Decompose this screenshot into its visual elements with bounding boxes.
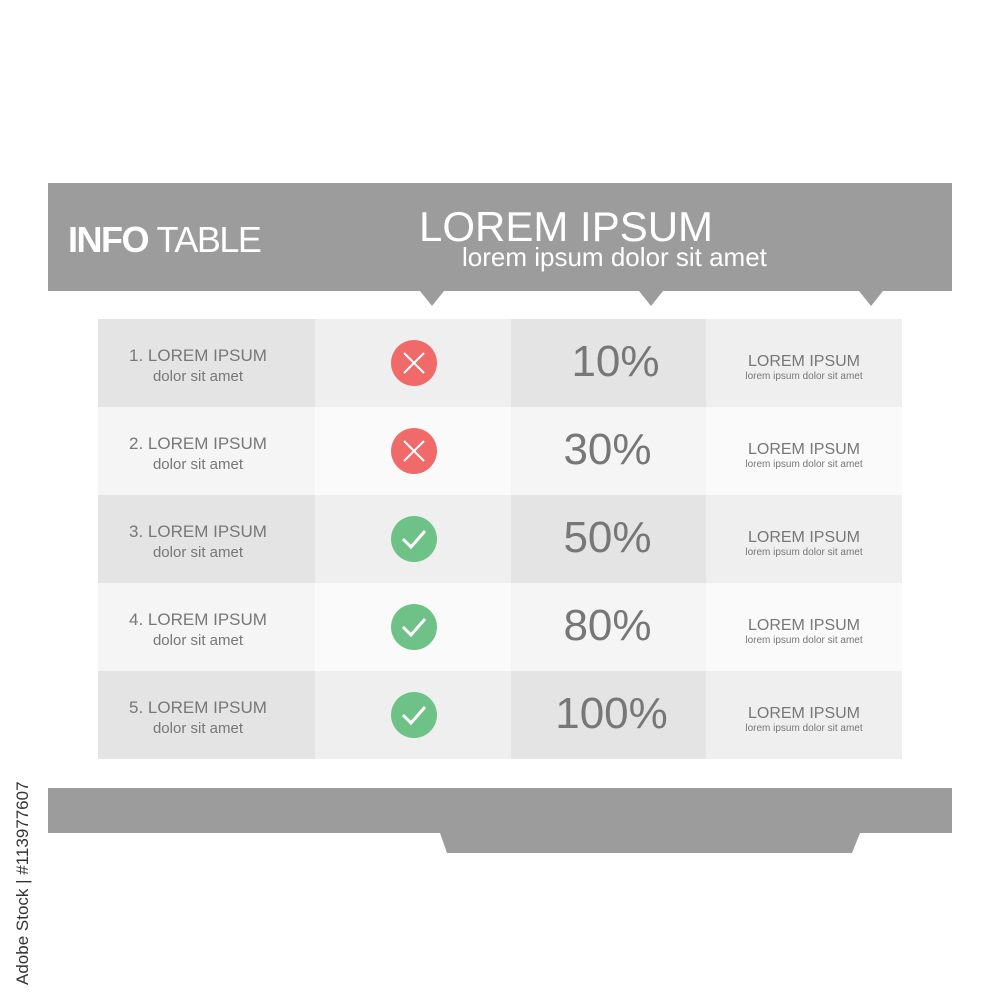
icon: cross xyxy=(391,428,437,474)
row 2: 2. LOREM IPSUM xyxy=(129,434,267,453)
row 5: LOREM IPSUM xyxy=(748,705,860,722)
row 3: lorem ipsum dolor sit amet xyxy=(745,547,863,558)
row 3: 50% xyxy=(563,513,652,562)
row 2: lorem ipsum dolor sit amet xyxy=(745,459,863,470)
row 4: 4. LOREM IPSUM xyxy=(129,610,267,629)
title: info table: INFO TABLE xyxy=(68,219,260,260)
heading: lorem ipsum: LOREM IPSUM xyxy=(419,203,713,250)
row 4: LOREM IPSUM xyxy=(748,617,860,634)
icon: check xyxy=(391,692,437,738)
header bar xyxy=(48,183,952,291)
row 3: dolor sit amet xyxy=(153,544,243,561)
row 5 xyxy=(98,671,902,759)
footer bar xyxy=(48,788,952,853)
row 3: LOREM IPSUM xyxy=(748,529,860,546)
row 4: dolor sit amet xyxy=(153,632,243,649)
row 2: dolor sit amet xyxy=(153,456,243,473)
row 5: 5. LOREM IPSUM xyxy=(129,698,267,717)
icon: cross xyxy=(391,340,437,386)
row 5: lorem ipsum dolor sit amet xyxy=(745,723,863,734)
row 2 xyxy=(98,407,863,495)
icon: check xyxy=(391,604,437,650)
row 2: LOREM IPSUM xyxy=(748,441,860,458)
watermark id text: Adobe Stock | #113977607 xyxy=(13,781,32,985)
row 1: 10% xyxy=(571,337,660,386)
row 1: LOREM IPSUM xyxy=(748,353,860,370)
row 3 xyxy=(98,495,902,583)
icon: check xyxy=(391,516,437,562)
row 1: lorem ipsum dolor sit amet xyxy=(745,371,863,382)
header pointers xyxy=(420,291,883,306)
subheading: lorem ipsum dolor sit amet xyxy=(462,242,767,272)
row 5: dolor sit amet xyxy=(153,720,243,737)
row 4: lorem ipsum dolor sit amet xyxy=(745,635,863,646)
row 4 xyxy=(98,583,863,671)
row 3: 3. LOREM IPSUM xyxy=(129,522,267,541)
row 1: dolor sit amet xyxy=(153,368,243,385)
row 1: 1. LOREM IPSUM xyxy=(129,346,267,365)
row 1 xyxy=(98,319,902,407)
row 4: 80% xyxy=(563,601,652,650)
row 2: 30% xyxy=(563,425,652,474)
row 5: 100% xyxy=(555,689,668,738)
